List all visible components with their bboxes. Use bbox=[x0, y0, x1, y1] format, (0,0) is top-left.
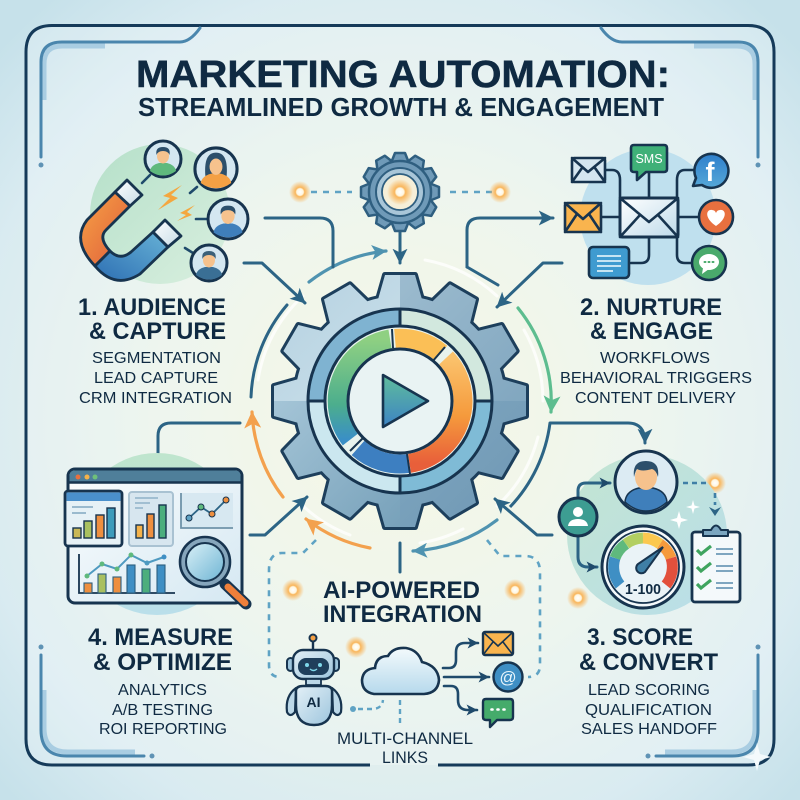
icon: robot: AI bbox=[306, 694, 320, 710]
icon: yellow envelope bbox=[565, 203, 601, 232]
icon: facebook: f bbox=[706, 157, 716, 187]
heading: AI-powered: INTEGRATION bbox=[323, 601, 482, 628]
donut segments bbox=[337, 329, 463, 474]
list: measure items: A/B TESTING bbox=[112, 702, 213, 719]
list: score items: QUALIFICATION bbox=[585, 702, 712, 719]
panel: nurture and engage bbox=[560, 145, 752, 407]
list: audience items: SEGMENTATION bbox=[92, 350, 221, 367]
glowing nodes bbox=[282, 179, 726, 658]
icon: person blue bbox=[208, 199, 248, 239]
icon: magnet bbox=[81, 180, 181, 280]
icon: content note bbox=[589, 247, 629, 278]
list: nurture items: WORKFLOWS bbox=[600, 350, 710, 367]
icon: score gauge: 1-100 bbox=[625, 581, 661, 598]
icon: channel arrows bbox=[443, 643, 489, 710]
icon: lead avatar bbox=[615, 451, 677, 513]
cycle ring arrows bbox=[251, 251, 551, 551]
heading: score bbox=[579, 624, 718, 676]
play button bbox=[348, 349, 452, 453]
heading: AI-powered bbox=[323, 577, 482, 628]
dashed links bbox=[269, 192, 540, 677]
icon: robot link dot bbox=[350, 706, 356, 712]
icon: backdrop circle bbox=[567, 455, 727, 615]
heading: audience: & CAPTURE bbox=[89, 318, 226, 345]
title: MARKETING AUTOMATION: bbox=[136, 54, 670, 96]
icon: heart bbox=[699, 200, 733, 234]
list: nurture items bbox=[560, 350, 752, 407]
icon: person teal bbox=[191, 245, 227, 281]
icon: backdrop circle bbox=[76, 453, 238, 615]
panel: AI-powered integration bbox=[287, 577, 522, 767]
heading: nurture: & ENGAGE bbox=[590, 318, 713, 345]
icon: lightning bolts bbox=[158, 185, 195, 221]
chart: card one bbox=[65, 491, 122, 546]
panel: audience and capture bbox=[78, 141, 248, 407]
list: nurture items: CONTENT DELIVERY bbox=[575, 390, 736, 407]
icon: backdrop circle bbox=[90, 144, 230, 284]
label: multi-channel links: LINKS bbox=[382, 748, 428, 767]
chart: card two bbox=[129, 492, 173, 546]
icon: chat bubble bbox=[483, 699, 513, 727]
icon: contact badge bbox=[559, 498, 597, 536]
small top gear bbox=[361, 153, 439, 231]
icon: facebook bbox=[693, 154, 728, 188]
icon: cloud bbox=[362, 648, 439, 694]
icon: SMS bubble: SMS bbox=[635, 152, 663, 166]
icon: person green bbox=[145, 141, 181, 177]
title bbox=[136, 54, 670, 122]
heading: AI-powered: AI-POWERED bbox=[323, 577, 480, 604]
icon: at sign bbox=[494, 662, 522, 692]
heading: audience: 1. AUDIENCE bbox=[78, 294, 226, 321]
icon: score gauge bbox=[602, 526, 684, 608]
heading: nurture: 2. NURTURE bbox=[580, 294, 722, 321]
list: score items: LEAD SCORING bbox=[588, 682, 710, 699]
icon: flow connectors bbox=[578, 483, 610, 498]
heading: measure bbox=[88, 624, 233, 676]
list: audience items bbox=[79, 350, 232, 407]
list: measure items: ANALYTICS bbox=[118, 682, 207, 699]
list: audience items: LEAD CAPTURE bbox=[94, 370, 218, 387]
list: score items: SALES HANDOFF bbox=[581, 721, 717, 738]
icon: channel connectors bbox=[601, 170, 699, 263]
icon: magnifier bbox=[180, 537, 246, 604]
list: nurture items: BEHAVIORAL TRIGGERS bbox=[560, 370, 752, 387]
heading: score: 3. SCORE bbox=[587, 624, 693, 651]
icon: email bbox=[483, 632, 513, 655]
central gear bbox=[265, 265, 535, 537]
icon: small envelope bbox=[572, 158, 605, 182]
chart: bars with trend bbox=[79, 552, 175, 593]
connector arrows bbox=[158, 218, 645, 572]
subtitle: STREAMLINED GROWTH & ENGAGEMENT bbox=[138, 92, 664, 122]
list: measure items bbox=[99, 682, 227, 738]
icon: robot bbox=[287, 634, 341, 725]
icon: person orange bbox=[195, 148, 237, 190]
panel: score and convert bbox=[559, 451, 740, 738]
icon: at sign: @ bbox=[499, 668, 517, 687]
list: score items bbox=[581, 682, 717, 738]
icon: dashboard window bbox=[68, 469, 242, 603]
chart: line trend bbox=[181, 493, 233, 528]
icon: checklist clipboard bbox=[692, 526, 740, 602]
icon: cloud link dashes bbox=[358, 700, 400, 723]
heading: measure: & OPTIMIZE bbox=[93, 649, 232, 676]
list: measure items: ROI REPORTING bbox=[99, 721, 227, 738]
label: multi-channel links: MULTI-CHANNEL bbox=[337, 729, 473, 748]
heading: nurture bbox=[580, 294, 722, 345]
heading: audience bbox=[78, 294, 226, 345]
icon: backdrop circle bbox=[580, 149, 716, 285]
icon: central envelope bbox=[620, 198, 678, 237]
heading: measure: 4. MEASURE bbox=[88, 624, 233, 651]
list: audience items: CRM INTEGRATION bbox=[79, 390, 232, 407]
icon: link dashes bbox=[142, 175, 207, 253]
heading: score: & CONVERT bbox=[579, 649, 718, 676]
panel: measure and optimize bbox=[65, 453, 246, 738]
label: multi-channel links bbox=[337, 729, 473, 767]
icon: sparkles bbox=[670, 500, 700, 529]
icon: SMS bubble bbox=[631, 145, 667, 180]
icon: chat bbox=[692, 246, 726, 280]
